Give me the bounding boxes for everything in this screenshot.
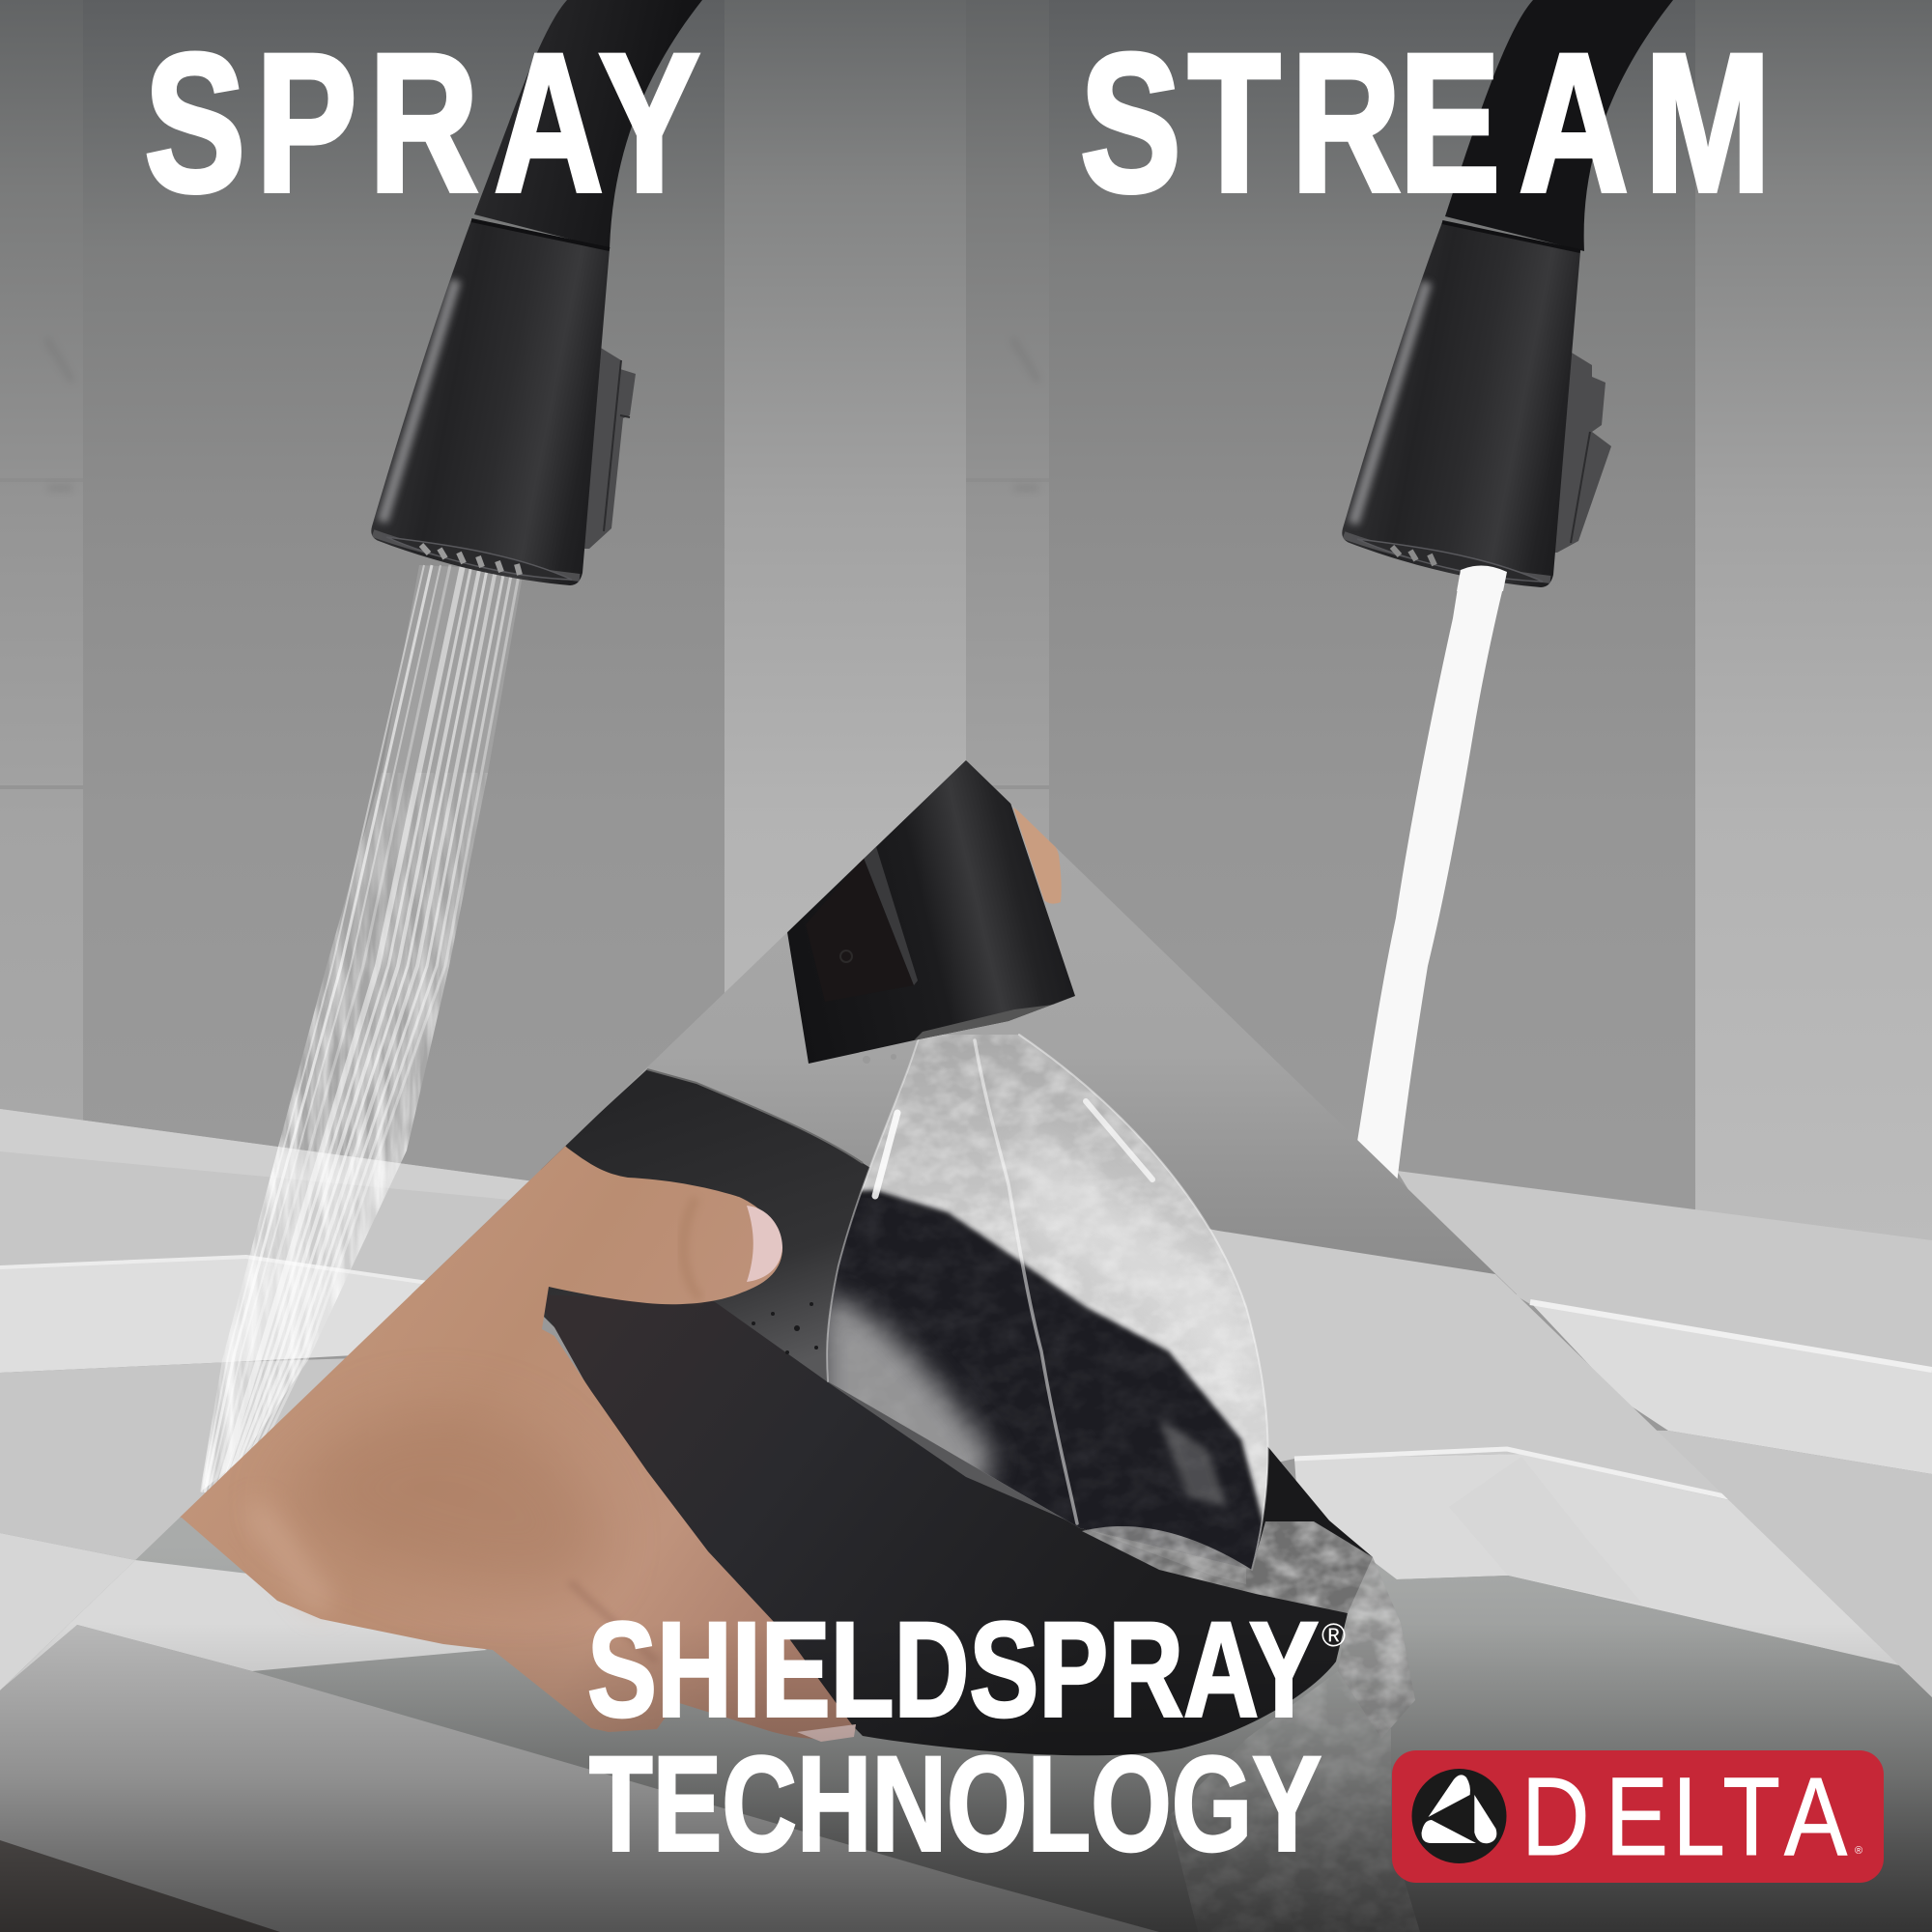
heading: shieldspray technology: ® (1321, 1617, 1346, 1654)
bottom shading (0, 1623, 1932, 1932)
faucet: stream (1342, 0, 1673, 591)
water droplets (752, 1302, 818, 1354)
heading: shieldspray technology: TECHNOLOGY (589, 1727, 1321, 1880)
water: stream (1357, 564, 1507, 1183)
title: stream: STREAM (1080, 13, 1771, 233)
water: splash (1082, 1521, 1415, 1739)
registered mark: ® (1855, 1845, 1862, 1857)
faucet: center (787, 760, 1075, 1064)
sink basin (0, 1449, 1932, 1932)
wall: stream panel (966, 0, 1932, 1256)
wall: center (412, 848, 1517, 1294)
water: bell strokes (827, 1035, 1268, 1570)
heading: shieldspray technology (587, 1594, 1346, 1880)
faucet: spray (371, 0, 702, 585)
countertop: center right (1159, 1219, 1899, 1665)
water: spray (200, 565, 524, 1492)
thumb nail (747, 1206, 782, 1282)
heading: shieldspray technology: SHIELDSPRAY (587, 1594, 1319, 1745)
pan: outer wall (536, 1294, 1348, 1755)
pan: far tip (1246, 1439, 1373, 1613)
wall: spray panel (0, 0, 966, 1256)
countertop: stream panel (1397, 1171, 1932, 1739)
logo: delta (1392, 1750, 1884, 1883)
finger nail (797, 1724, 856, 1742)
wordmark: DELTA (1521, 1753, 1847, 1879)
panel: shieldspray photo (0, 753, 1932, 1932)
title: spray: SPRAY (144, 13, 700, 233)
panel: spray (0, 0, 966, 1739)
finger on sprayer (1013, 808, 1062, 904)
water: bell (827, 1035, 1267, 1570)
water: falling (1169, 1671, 1420, 1932)
countertop: spray panel (0, 1109, 541, 1739)
panel: stream (966, 0, 1932, 1739)
icon: delta symbol (1412, 1769, 1507, 1863)
hand (180, 1146, 856, 1742)
pan (522, 1069, 1373, 1755)
